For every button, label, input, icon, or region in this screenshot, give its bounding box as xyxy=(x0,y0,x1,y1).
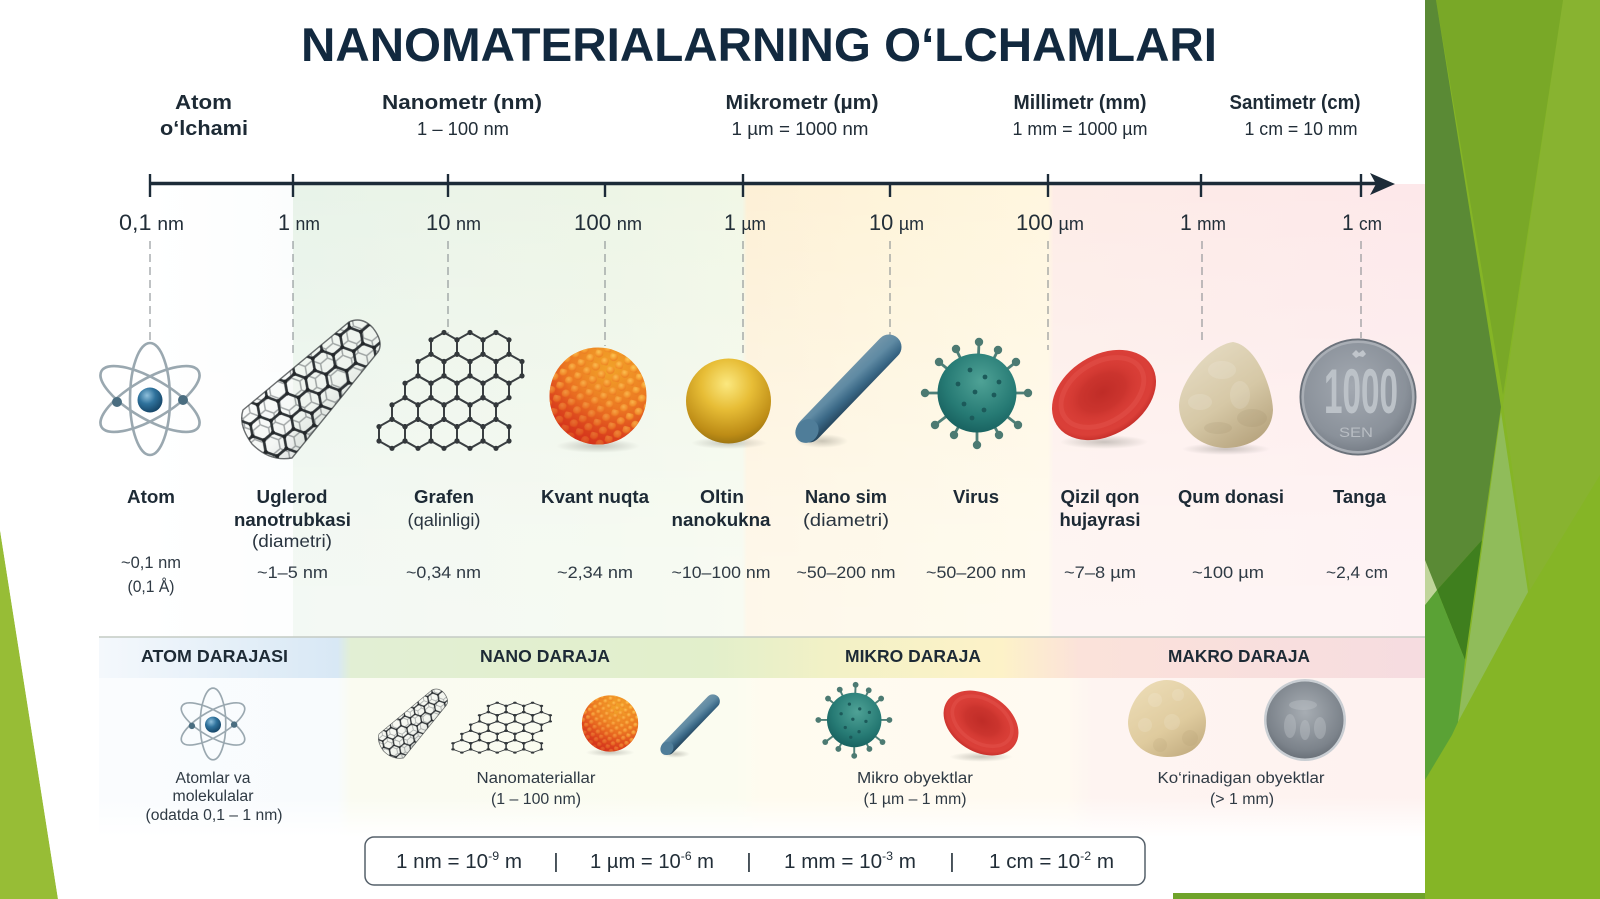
header: micrometer: 1 µm = 1000 nm xyxy=(732,119,868,139)
label: sand grain: Qum donasi xyxy=(1178,486,1284,507)
level: macro xyxy=(1128,679,1346,808)
icon: small graphene xyxy=(451,702,552,754)
text: atoms and molecules: Atomlar va xyxy=(176,770,251,787)
scale axis with ticks and arrow xyxy=(150,173,1395,197)
label: quantum dot xyxy=(541,486,650,582)
level: nano xyxy=(375,686,713,808)
label: quantum dot: ~2,34 nm xyxy=(557,563,633,582)
label: atom: (0,1 Å) xyxy=(128,577,174,596)
panel: unit conversion box: m xyxy=(499,851,522,873)
text: atoms and molecules: (odatda 0,1 – 1 nm) xyxy=(146,807,282,824)
panel: unit conversion box: m xyxy=(692,851,714,873)
icon: small coin xyxy=(1264,679,1346,761)
text: micro objects xyxy=(857,770,973,808)
icon: atom xyxy=(92,343,208,455)
icon: small red blood cell xyxy=(932,677,1030,769)
label: atom: Atom xyxy=(127,486,175,507)
tick labels: 1 cm xyxy=(1342,210,1382,235)
text: visible objects: (> 1 mm) xyxy=(1210,791,1274,808)
icon: gold nanoparticle xyxy=(686,358,771,449)
tick labels: 0,1 nm xyxy=(119,210,184,235)
panel: unit conversion box: -6 xyxy=(681,849,692,863)
level: atomic xyxy=(146,688,282,824)
panel: levels heading band xyxy=(99,637,1425,678)
icon: small nanowire xyxy=(658,701,713,758)
label: gold nanoparticle: nanokukna xyxy=(672,509,771,530)
panel: unit conversion box: | xyxy=(949,851,955,873)
header: nanometer: Nanometr (nm) xyxy=(382,92,542,114)
header: centimeter: Santimetr (cm) xyxy=(1230,92,1360,114)
label: graphene: (qalinligi) xyxy=(408,510,480,530)
icon: coin xyxy=(1300,338,1416,456)
label: carbon nanotube: Uglerod xyxy=(256,486,328,507)
panel: levels heading band: ATOM DARAJASI xyxy=(141,646,288,666)
panel: unit conversion box: -2 xyxy=(1080,849,1091,863)
panel: unit conversion box xyxy=(365,837,1145,885)
label: coin: ~2,4 cm xyxy=(1326,563,1388,582)
title: NANOMATERIALARNING O‘LCHAMLARI xyxy=(301,19,1217,72)
label: nanowire: Nano sim xyxy=(805,486,887,507)
label: virus xyxy=(926,486,1026,582)
label: quantum dot: Kvant nuqta xyxy=(541,486,650,507)
panel: scale background zones xyxy=(150,184,1425,637)
header: micrometer xyxy=(726,92,878,139)
label: sand grain xyxy=(1178,486,1284,582)
object labels and sizes xyxy=(121,486,1388,596)
decoration: green facets on the right xyxy=(1173,0,1600,899)
label: nanowire: ~50–200 nm xyxy=(796,563,896,582)
header: nanometer: 1 – 100 nm xyxy=(417,119,509,139)
label: atom xyxy=(121,486,181,596)
tick labels: 1 nm xyxy=(278,210,320,235)
label: gold nanoparticle xyxy=(672,486,771,582)
header: nanometer xyxy=(382,92,542,139)
icon: graphene sheet xyxy=(376,330,525,451)
label: carbon nanotube: ~1–5 nm xyxy=(257,563,328,582)
label: carbon nanotube xyxy=(234,486,351,582)
icon: virus xyxy=(921,338,1032,449)
panel: levels heading band: NANO DARAJA xyxy=(480,646,610,666)
tick labels: 10 µm xyxy=(869,210,924,235)
label: graphene xyxy=(406,486,481,582)
label: atom: ~0,1 nm xyxy=(121,553,181,572)
icon: quantum dot xyxy=(545,345,651,453)
label: carbon nanotube: nanotrubkasi xyxy=(234,509,351,530)
panel: unit conversion box: m xyxy=(893,851,916,873)
text: visible objects xyxy=(1158,770,1324,808)
text: micro objects: Mikro obyektlar xyxy=(857,770,973,787)
panel: unit conversion box: 1 nm = 10 xyxy=(396,851,486,873)
tick labels: 10 nm xyxy=(426,210,481,235)
label: red blood cell: Qizil qon xyxy=(1060,486,1140,507)
text: nanomaterials xyxy=(476,770,596,808)
icon: sand grain xyxy=(1179,342,1273,455)
panel: unit conversion box: 1 µm = 10 xyxy=(590,851,680,873)
text: atoms and molecules xyxy=(146,770,282,824)
text: nanomaterials: (1 – 100 nm) xyxy=(491,791,581,808)
header: atom size: o‘lchami xyxy=(160,118,248,140)
tick labels: 1 mm xyxy=(1180,210,1226,235)
header: centimeter xyxy=(1230,92,1360,139)
header: micrometer: Mikrometr (µm) xyxy=(726,92,878,114)
panel: levels heading band: MIKRO DARAJA xyxy=(845,646,981,666)
level: micro xyxy=(815,677,1030,808)
text: visible objects: Ko‘rinadigan obyektlar xyxy=(1158,770,1324,787)
icon: small nanotube xyxy=(375,686,452,762)
tick labels xyxy=(119,210,1382,235)
icon: small atom xyxy=(176,688,250,760)
label: coin xyxy=(1326,486,1388,582)
text: micro objects: (1 µm – 1 mm) xyxy=(864,791,966,808)
panel: unit conversion box: 1 mm = 10 xyxy=(784,851,879,873)
panel: unit conversion box: | xyxy=(746,851,752,873)
decoration: green left triangle xyxy=(0,530,58,899)
tick labels: 100 nm xyxy=(574,210,642,235)
label: coin: Tanga xyxy=(1333,486,1387,507)
panel: unit conversion box: -3 xyxy=(882,849,893,863)
label: red blood cell xyxy=(1060,486,1140,582)
icon: nanowire xyxy=(791,347,889,448)
panel: unit conversion box: | xyxy=(553,851,559,873)
tick labels: 100 µm xyxy=(1016,210,1084,235)
label: red blood cell: ~7–8 µm xyxy=(1064,563,1136,582)
icon: small virus xyxy=(815,682,892,759)
label: graphene: Grafen xyxy=(414,486,474,507)
header: millimeter: 1 mm = 1000 µm xyxy=(1012,119,1148,139)
label: graphene: ~0,34 nm xyxy=(406,563,481,582)
icon: red blood cell xyxy=(1035,331,1173,459)
label: red blood cell: hujayrasi xyxy=(1060,509,1140,530)
header: millimeter: Millimetr (mm) xyxy=(1014,92,1146,114)
icon: small sand grain xyxy=(1128,680,1206,757)
icon: carbon nanotube xyxy=(235,315,390,465)
tick labels: 1 µm xyxy=(724,210,766,235)
icon: coin: SEN xyxy=(1339,424,1373,440)
header: atom size xyxy=(160,92,248,140)
label: gold nanoparticle: ~10–100 nm xyxy=(672,563,770,582)
header: centimeter: 1 cm = 10 mm xyxy=(1244,119,1358,139)
label: sand grain: ~100 µm xyxy=(1192,563,1264,582)
scale unit headers xyxy=(160,92,1360,140)
label: virus: ~50–200 nm xyxy=(926,563,1026,582)
icon: small quantum dot xyxy=(579,694,641,757)
header: atom size: Atom xyxy=(175,92,232,114)
label: nanowire: (diametri) xyxy=(803,510,889,530)
text: nanomaterials: Nanomateriallar xyxy=(476,770,596,787)
icon: coin: 1000 xyxy=(1324,357,1398,427)
label: carbon nanotube: (diametri) xyxy=(252,531,332,551)
panel: unit conversion box: -9 xyxy=(488,849,499,863)
header: millimeter xyxy=(1012,92,1148,139)
label: nanowire xyxy=(796,486,896,582)
panel: levels body xyxy=(99,637,1425,837)
label: gold nanoparticle: Oltin xyxy=(700,486,744,507)
panel: levels heading band: MAKRO DARAJA xyxy=(1168,646,1310,666)
panel: unit conversion box: 1 cm = 10 xyxy=(989,851,1077,873)
panel: unit conversion box: m xyxy=(1091,851,1114,873)
text: atoms and molecules: molekulalar xyxy=(172,788,254,805)
label: virus: Virus xyxy=(953,486,999,507)
